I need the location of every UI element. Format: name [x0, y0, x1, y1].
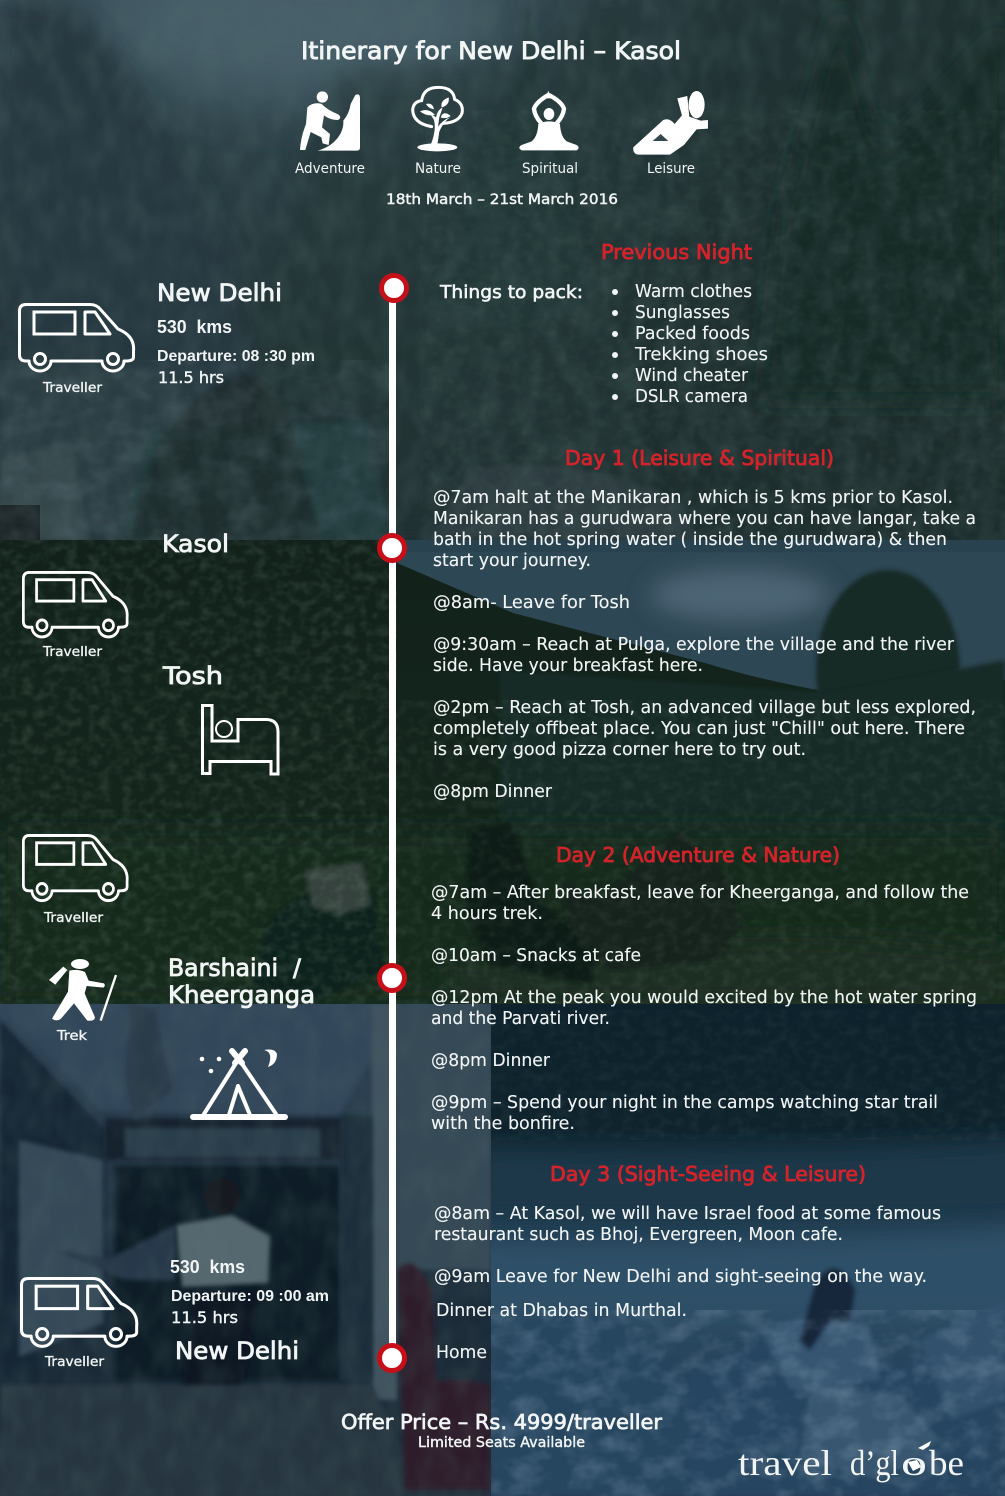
heading: day 1: Day 1 (Leisure & Spiritual) [565, 446, 834, 470]
logo: travel d'globe: o [901, 1443, 927, 1483]
offer price: Offer Price – Rs. 4999/traveller [341, 1410, 663, 1434]
day 2 itinerary: @8pm Dinner [431, 1051, 551, 1071]
icon: nature [413, 87, 462, 151]
day 3 itinerary: Home [436, 1343, 487, 1363]
duration: 11.5 hrs [158, 368, 224, 387]
place: Barshaini / Kheerganga: Kheerganga [168, 981, 315, 1009]
title: Itinerary for New Delhi – Kasol [301, 37, 681, 65]
stop: New Delhi [382, 276, 406, 300]
logo: travel d'globe: travel [738, 1443, 832, 1483]
packing list: Sunglasses [635, 303, 730, 323]
day 2 itinerary: @10am – Snacks at cafe [431, 946, 641, 966]
packing list: Trekking shoes [634, 345, 768, 365]
icon: spiritual [519, 91, 579, 150]
day 1 itinerary: Manikaran has a gurudwara where you can have langar, take a [433, 509, 976, 529]
day 1 itinerary: side. Have your breakfast here. [433, 656, 703, 676]
icon: van 4 [22, 1279, 137, 1346]
day 3 itinerary: @9am Leave for New Delhi and sight-seeing on the way. [434, 1267, 927, 1287]
heading: previous night: Previous Night [601, 240, 752, 264]
day 1 itinerary: is a very good pizza corner here to try out. [433, 740, 806, 760]
packing list [612, 282, 768, 407]
photo: dancers in a room [0, 1004, 491, 1496]
things to pack label: Things to pack: [439, 282, 583, 303]
icon: van 1 [20, 304, 134, 371]
day 1 itinerary: @7am halt at the Manikaran , which is 5 kms prior to Kasol. [433, 488, 953, 508]
packing list: DSLR camera [635, 387, 748, 407]
day 2 itinerary: @9pm – Spend your night in the camps watching star trail [431, 1093, 938, 1113]
place: Barshaini / Kheerganga: Barshaini / [168, 954, 302, 982]
day 3 itinerary [434, 1204, 941, 1363]
stop: Barshaini / Kheerganga [380, 966, 404, 990]
place: New Delhi return: New Delhi [175, 1337, 299, 1365]
icon: trekker [49, 959, 116, 1021]
distance: 530 kms [157, 317, 232, 337]
duration: return: 11.5 hrs [171, 1308, 238, 1327]
photo: misty forest [0, 0, 1005, 540]
photo: green valley with hikers [0, 540, 1005, 1004]
departure: return: Departure: 09 :00 am [171, 1288, 329, 1305]
day 2 itinerary: and the Parvati river. [431, 1009, 610, 1029]
day 3 itinerary: restaurant such as Bhoj, Evergreen, Moon cafe. [434, 1225, 843, 1245]
label: spiritual: Spiritual [522, 161, 578, 177]
distance: return: 530 kms [170, 1257, 245, 1277]
day 2 itinerary: @12pm At the peak you would excited by the hot water spring [431, 988, 977, 1008]
logo: travel d'globe [738, 1441, 964, 1483]
day 1 itinerary: start your journey. [433, 551, 591, 571]
day 2 itinerary: 4 hours trek. [431, 904, 543, 924]
stop: Kasol [380, 536, 404, 560]
place: New Delhi: New Delhi [157, 279, 282, 307]
place: Barshaini / Kheerganga [168, 954, 315, 1009]
heading: day 3: Day 3 (Sight-Seeing & Leisure) [550, 1162, 866, 1186]
place: Tosh: Tosh [162, 662, 223, 690]
day 3 itinerary: Dinner at Dhabas in Murthal. [436, 1301, 687, 1321]
label: traveller 4: Traveller [44, 1355, 105, 1370]
photo: river and rocks [460, 1004, 1005, 1496]
place: Kasol: Kasol [162, 530, 229, 558]
stop: New Delhi return [380, 1346, 404, 1370]
icon: van 3 [23, 835, 127, 901]
day 1 itinerary: @2pm – Reach at Tosh, an advanced village but less explored, [433, 698, 976, 718]
day 1 itinerary [433, 488, 976, 802]
icon: adventure [300, 91, 360, 151]
icon: van 2 [23, 572, 127, 637]
logo: travel d'globe: d’gl [850, 1443, 899, 1483]
day 1 itinerary: @8am- Leave for Tosh [433, 593, 630, 613]
departure: Departure: 08 :30 pm [157, 348, 315, 365]
day 1 itinerary: @8pm Dinner [433, 782, 553, 802]
day 2 itinerary [431, 883, 977, 1134]
label: adventure: Adventure [295, 161, 365, 177]
packing list: Packed foods [635, 324, 750, 344]
label: traveller 2: Traveller [42, 645, 103, 660]
icon: leisure [633, 91, 708, 155]
timeline [380, 276, 406, 1370]
day 3 itinerary: @8am – At Kasol, we will have Israel food at some famous [434, 1204, 941, 1224]
icon: bed [202, 706, 278, 774]
label: nature: Nature [415, 161, 461, 177]
day 2 itinerary: with the bonfire. [431, 1114, 575, 1134]
label: traveller 1: Traveller [42, 381, 103, 396]
limited seats note: Limited Seats Available [418, 1435, 585, 1451]
logo: travel d'globe: be [929, 1443, 964, 1483]
day 1 itinerary: bath in the hot spring water ( inside the gurudwara) & then [433, 530, 947, 550]
label: traveller 3: Traveller [43, 911, 104, 926]
heading: day 2: Day 2 (Adventure & Nature) [556, 843, 840, 867]
label: leisure: Leisure [647, 161, 695, 177]
packing list: Wind cheater [635, 366, 749, 386]
date range: 18th March – 21st March 2016 [386, 192, 618, 208]
icon: tent [193, 1050, 285, 1117]
packing list: Warm clothes [635, 282, 752, 302]
day 1 itinerary: @9:30am – Reach at Pulga, explore the village and the river [433, 635, 955, 655]
day 1 itinerary: completely offbeat place. You can just "Chill" out here. There [433, 719, 965, 739]
day 2 itinerary: @7am – After breakfast, leave for Kheerganga, and follow the [431, 883, 969, 903]
label: trek: Trek [56, 1029, 88, 1044]
